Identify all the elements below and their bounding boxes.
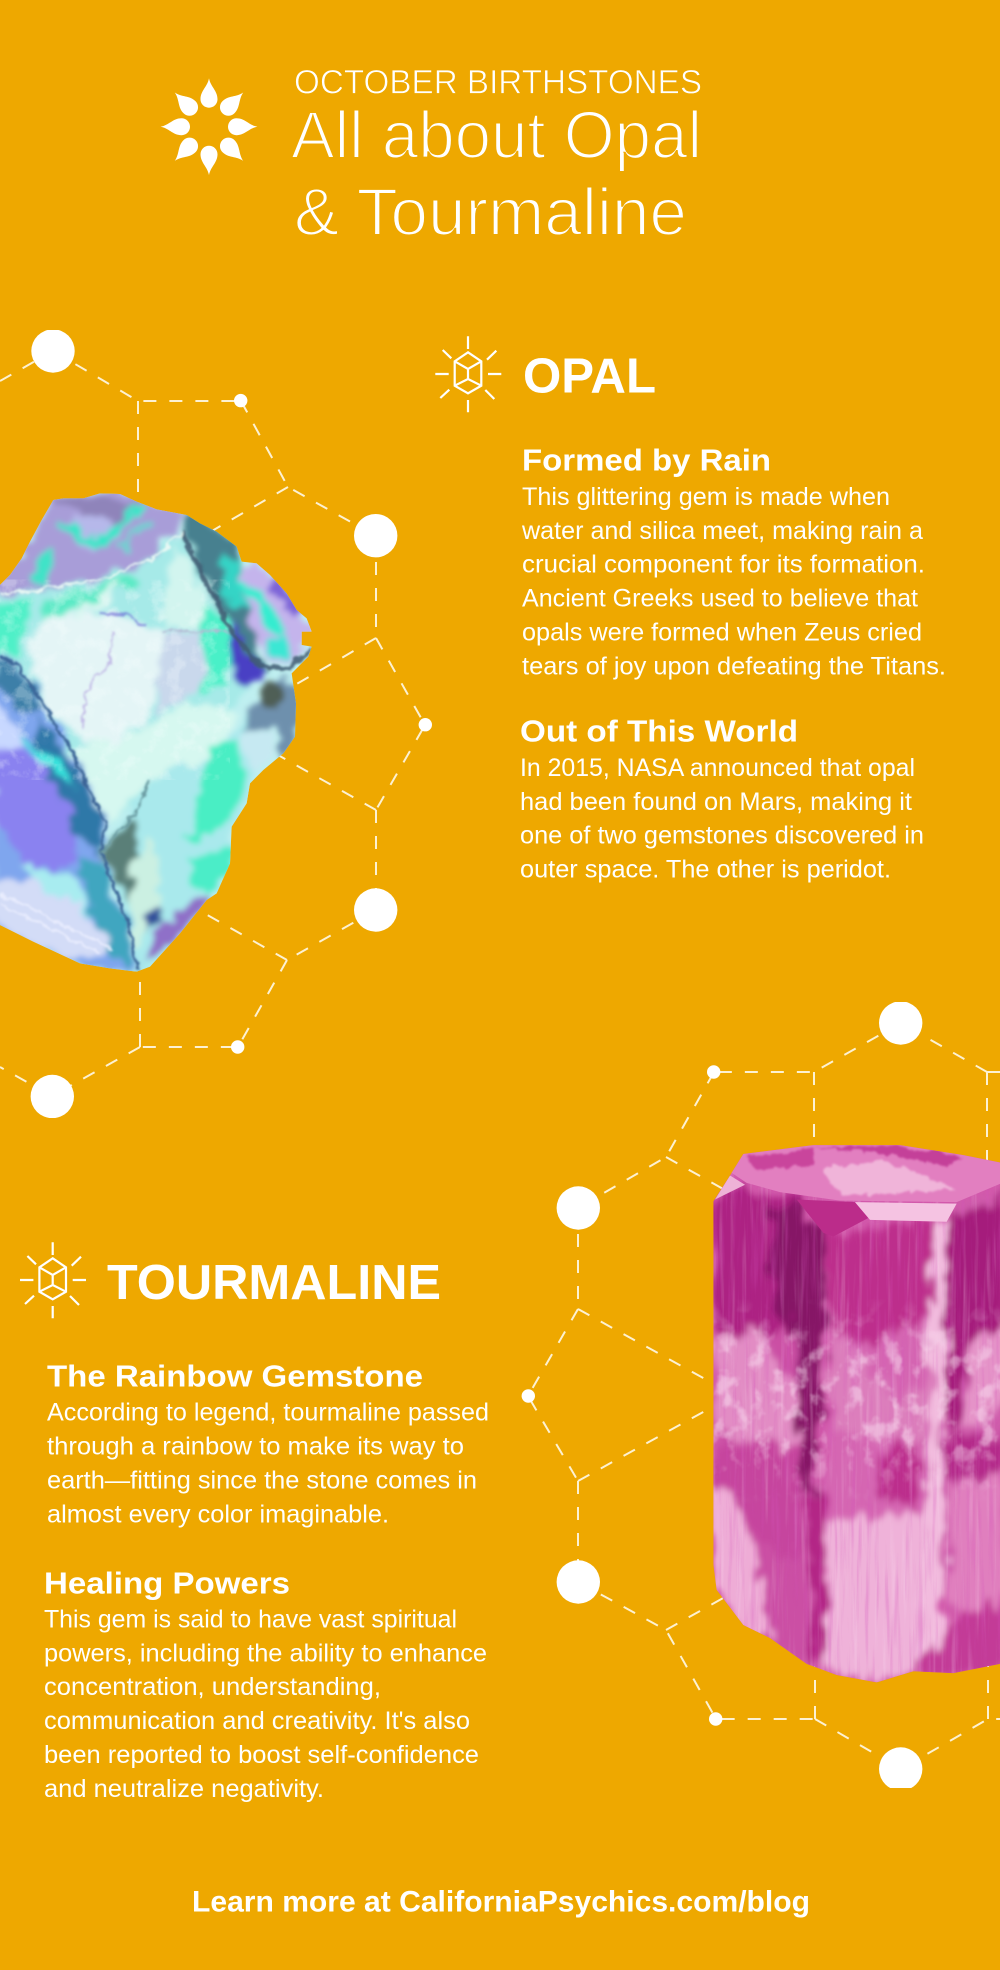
center face: [0, 533, 253, 823]
block: formed by rain: Formed by Rain: [522, 443, 771, 478]
block: the rainbow gemstone: According to legend, tourmaline passed: [47, 1399, 489, 1427]
block: formed by rain: crucial component for its formation.: [522, 551, 925, 579]
header: [161, 64, 702, 250]
block: the rainbow gemstone: [47, 1359, 489, 1528]
block: formed by rain: Ancient Greeks used to believe that: [522, 585, 918, 613]
top face: [0, 493, 187, 598]
block: formed by rain: water and silica meet, making rain a: [521, 517, 923, 545]
right band: [182, 515, 263, 683]
bottom fragment: [913, 1601, 1000, 1675]
block: the rainbow gemstone: almost every color imaginable.: [47, 1500, 389, 1528]
center face: [827, 1222, 943, 1686]
block: out of this world: one of two gemstones discovered in: [520, 822, 924, 850]
block: the rainbow gemstone: earth—fitting since the stone comes in: [47, 1466, 477, 1494]
network diagram: tourmaline: [522, 1001, 1000, 1791]
block: healing powers: Healing Powers: [44, 1565, 290, 1600]
block: healing powers: powers, including the ability to enhance: [44, 1639, 487, 1667]
icon: gem: [20, 1242, 86, 1318]
block: healing powers: communication and creativity. It's also: [44, 1707, 470, 1735]
block: healing powers: [44, 1565, 487, 1803]
icon: sun: [161, 78, 257, 175]
pale stripe: [920, 1223, 947, 1668]
block: healing powers: and neutralize negativity.: [44, 1775, 324, 1803]
block: out of this world: Out of This World: [520, 714, 798, 749]
block: the rainbow gemstone: through a rainbow to make its way to: [47, 1433, 464, 1461]
lower right: [107, 710, 253, 977]
rim: [730, 1142, 1000, 1202]
title: main heading: All about Opal: [291, 98, 702, 173]
footer call to action: Learn more at CaliforniaPsychics.com/blog: [192, 1886, 810, 1919]
heading: tourmaline: TOURMALINE: [107, 1256, 441, 1310]
block: out of this world: [520, 714, 924, 884]
block: out of this world: had been found on Mars, making it: [520, 788, 912, 816]
facets: [715, 1176, 745, 1200]
heading: opal: OPAL: [523, 350, 656, 404]
block: healing powers: concentration, understanding,: [44, 1673, 381, 1701]
block: healing powers: This gem is said to have vast spiritual: [44, 1605, 457, 1633]
panel: opal: [435, 336, 946, 884]
dark stripe: [770, 1205, 827, 1494]
creases: [0, 533, 312, 972]
illustration: opal gemstone: [0, 483, 320, 980]
block: out of this world: outer space. The other is peridot.: [520, 856, 891, 884]
icon: gem: [435, 336, 501, 412]
block: formed by rain: [521, 443, 946, 681]
title: eyebrow: OCTOBER BIRTHSTONES: [294, 64, 702, 102]
block: the rainbow gemstone: The Rainbow Gemstone: [47, 1359, 423, 1394]
network diagram: opal: [0, 329, 432, 1118]
panel: tourmaline: [20, 1242, 489, 1803]
block: formed by rain: opals were formed when Zeus cried: [522, 619, 922, 647]
block: out of this world: In 2015, NASA announced that opal: [520, 754, 915, 782]
gray patch: [243, 670, 300, 757]
block: healing powers: been reported to boost self-confidence: [44, 1741, 479, 1769]
block: formed by rain: tears of joy upon defeating the Titans.: [522, 653, 946, 681]
title: main heading: & Tourmaline: [294, 175, 687, 250]
illustration: tourmaline gemstone: [710, 1142, 1000, 1686]
block: formed by rain: This glittering gem is made when: [522, 483, 890, 511]
right lavender wing: [242, 563, 315, 665]
right face: [938, 1188, 1000, 1557]
left lower face: [0, 655, 137, 973]
title: main heading: [291, 98, 702, 250]
left face: [721, 1208, 823, 1665]
